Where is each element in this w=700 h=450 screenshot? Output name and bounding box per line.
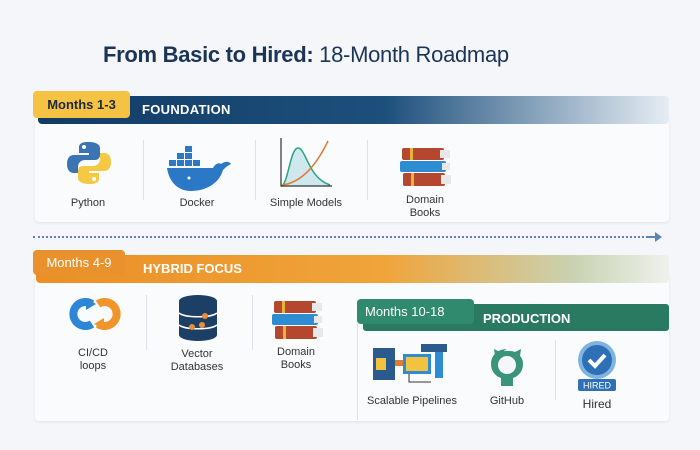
icon: vector database — [179, 295, 217, 341]
label: vector databases: Vector — [181, 348, 213, 360]
tag: months 4-9 — [33, 250, 125, 275]
icon: docker — [167, 146, 231, 191]
tag: months 1-3 — [33, 91, 130, 118]
label: docker: Docker — [180, 197, 214, 209]
label: scalable pipelines: Scalable Pipelines — [367, 395, 457, 407]
icon: scalable pipelines — [373, 344, 447, 382]
label: python: Python — [71, 197, 105, 209]
banner: foundation — [38, 96, 669, 124]
banner: hybrid focus — [36, 255, 669, 283]
label: domain books 2: Books — [281, 359, 311, 371]
label: vector databases: Databases — [171, 361, 223, 373]
icon: github — [491, 349, 523, 386]
panel: production — [357, 299, 669, 331]
icon: hired badge — [578, 341, 616, 391]
card background — [35, 275, 669, 421]
banner: production — [363, 304, 669, 331]
label: vector databases — [171, 348, 223, 373]
label: hired: Hired — [583, 397, 611, 411]
label: ci/cd loops: CI/CD — [78, 347, 108, 359]
tag: months 4-9: Months 4-9 — [46, 255, 112, 270]
heading: foundation: FOUNDATION — [142, 102, 231, 117]
icon: domain books 2 — [272, 301, 323, 339]
label: domain books 2: Domain — [277, 346, 315, 358]
tag: months 10-18 — [357, 299, 474, 324]
label: domain books: Domain — [406, 194, 444, 206]
tag: months 1-3: Months 1-3 — [47, 97, 116, 112]
panel: hybrid focus — [33, 250, 669, 422]
icon: hired badge: HIRED — [583, 380, 611, 390]
card background — [35, 116, 669, 222]
label: domain books 2 — [277, 346, 315, 371]
tag: months 10-18: Months 10-18 — [365, 304, 444, 319]
label: domain books — [406, 194, 444, 219]
label: ci/cd loops — [78, 347, 108, 372]
label: ci/cd loops: loops — [80, 360, 106, 372]
title: From Basic to Hired: 18-Month Roadmap — [103, 42, 509, 67]
panel: foundation — [33, 91, 669, 223]
icon: domain books — [400, 148, 451, 186]
label: simple models: Simple Models — [270, 197, 342, 209]
icon: python — [67, 142, 111, 184]
icon: ci/cd loops — [69, 298, 121, 330]
heading: production: PRODUCTION — [483, 311, 570, 326]
arrow: timeline — [33, 232, 662, 242]
icon: simple models chart — [280, 138, 332, 187]
label: domain books: Books — [410, 207, 440, 219]
label: github: GitHub — [490, 395, 524, 407]
heading: hybrid focus: HYBRID FOCUS — [143, 261, 242, 276]
